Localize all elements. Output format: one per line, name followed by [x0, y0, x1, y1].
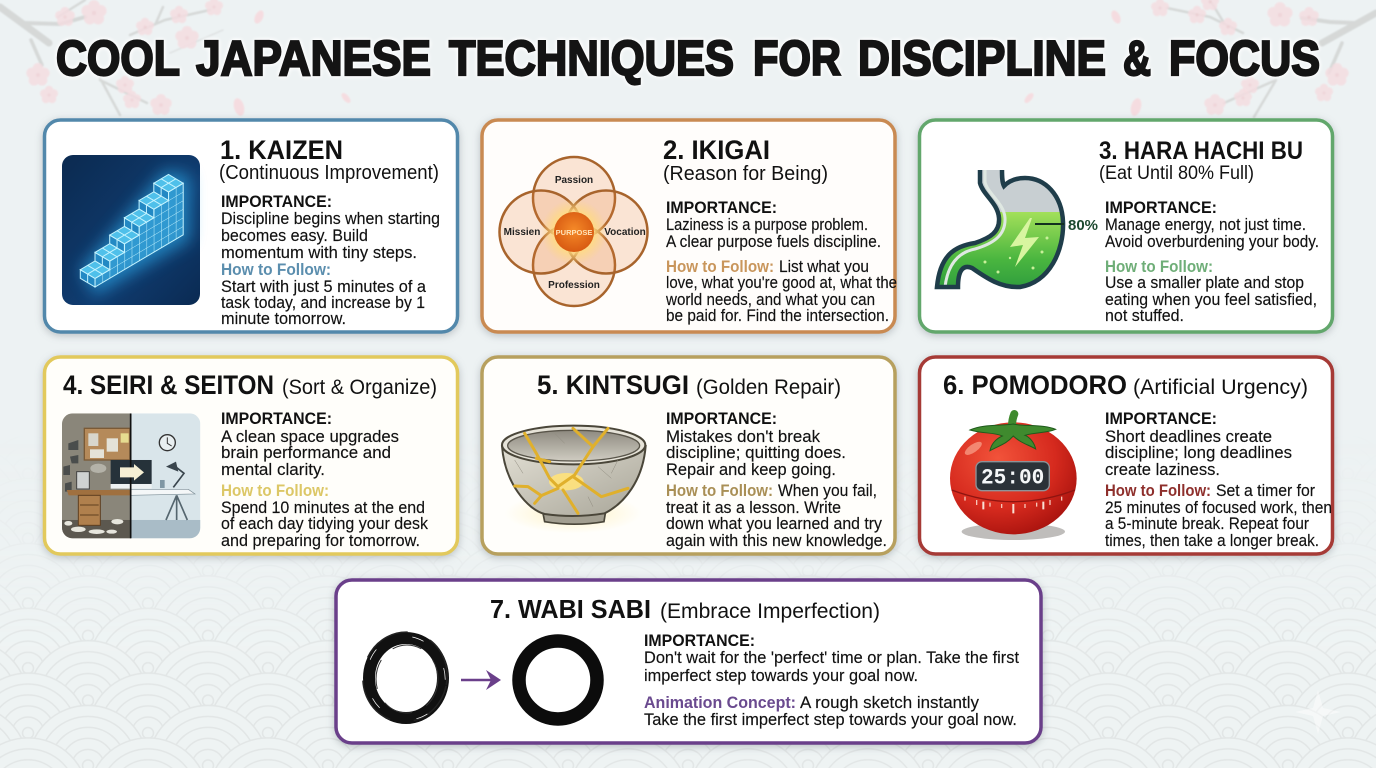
text block: times, then take a longer break. — [1105, 531, 1319, 550]
panel: kintsugi — [482, 357, 895, 554]
heading — [943, 370, 1308, 400]
text block: IMPORTANCE: — [1105, 409, 1217, 428]
heading — [1099, 137, 1303, 184]
text block: Set a timer for — [1216, 481, 1315, 500]
title: FOR — [753, 32, 841, 86]
card frame — [336, 580, 1041, 743]
text block: How to Follow: — [221, 481, 329, 500]
card frame — [482, 120, 895, 332]
heading — [537, 370, 841, 400]
card frame — [44, 120, 458, 332]
text block: How to Follow: — [666, 481, 773, 500]
heading: 2. IKIGAI — [663, 135, 770, 165]
text block: Manage energy, not just time. — [1105, 215, 1306, 234]
text block — [221, 409, 428, 550]
card frame — [44, 357, 458, 554]
title: & — [1123, 32, 1151, 86]
heading: 6. POMODORO — [943, 370, 1127, 400]
text block: A clear purpose fuels discipline. — [666, 232, 881, 251]
icon: ikigai venn diagram: Vocation — [604, 227, 646, 238]
text block: How to Follow: — [1105, 257, 1213, 276]
text block — [1105, 409, 1332, 550]
title: DISCIPLINE — [858, 32, 1106, 86]
wave pattern — [0, 598, 1376, 768]
text block: Spend 10 minutes at the end — [221, 498, 425, 517]
text block: brain performance and — [221, 443, 391, 462]
text block: IMPORTANCE: — [666, 409, 777, 428]
text block: mental clarity. — [221, 460, 325, 479]
panel: wabi sabi — [336, 580, 1041, 743]
text block — [666, 409, 887, 550]
text block — [644, 631, 1019, 729]
text block: 25 minutes of focused work, then — [1105, 498, 1332, 517]
text block: treat it as a lesson. Write — [666, 498, 841, 517]
text block: not stuffed. — [1105, 306, 1184, 325]
text block: List what you — [779, 257, 869, 276]
text block: How to Follow: — [666, 257, 774, 276]
icon: kintsugi bowl — [502, 426, 646, 533]
panel: pomodoro — [920, 357, 1332, 554]
text block: down what you learned and try — [666, 514, 882, 533]
title: FOCUS — [1169, 32, 1320, 86]
card frame — [920, 120, 1332, 332]
icon: tomato timer — [950, 414, 1077, 540]
heading: (Golden Repair) — [696, 376, 841, 399]
text block: IMPORTANCE: — [644, 631, 755, 650]
title: TECHNIQUES — [449, 32, 734, 86]
text block — [665, 198, 897, 325]
panel: hara hachi bu — [920, 120, 1332, 332]
text block: of each day tidying your desk — [221, 514, 428, 533]
icon: perfect enso circle — [519, 641, 597, 719]
icon: messy to clean desk — [62, 413, 200, 538]
icon: ikigai venn diagram: PURPOSE — [556, 228, 592, 237]
text block: discipline; quitting does. — [666, 443, 846, 462]
card frame — [920, 357, 1332, 554]
text block: A clean space upgrades — [221, 427, 399, 446]
heading: (Eat Until 80% Full) — [1099, 163, 1254, 184]
heading: 3. HARA HACHI BU — [1099, 137, 1303, 165]
icon: stomach 80 percent — [930, 165, 1098, 292]
sparkle — [1295, 690, 1341, 734]
title: COOL — [56, 32, 180, 86]
title — [56, 32, 1320, 86]
text block: Avoid overburdening your body. — [1105, 232, 1319, 251]
icon: ikigai venn diagram: Missien — [504, 227, 540, 238]
icon: rough enso circle — [355, 624, 455, 730]
heading — [490, 594, 880, 624]
title: JAPANESE — [196, 32, 431, 86]
heading: (Continuous Improvement) — [219, 162, 439, 184]
heading: (Artificial Urgency) — [1133, 376, 1308, 399]
panel: seiri and seiton — [44, 357, 458, 554]
icon: ikigai venn diagram — [500, 157, 648, 306]
text block: imperfect step towards your goal now. — [644, 666, 918, 685]
heading: 7. WABI SABI — [490, 594, 651, 624]
text block: again with this new knowledge. — [666, 531, 887, 550]
panel: kaizen — [44, 120, 458, 332]
text block: Use a smaller plate and stop — [1105, 273, 1304, 292]
text block — [221, 192, 440, 328]
panel: ikigai — [482, 120, 897, 332]
text block: IMPORTANCE: — [221, 192, 332, 211]
heading: (Sort & Organize) — [282, 376, 437, 399]
heading — [219, 135, 439, 184]
text block: Animation Concept: — [644, 693, 796, 712]
text block: and preparing for tomorrow. — [221, 531, 420, 550]
text block: Don't wait for the 'perfect' time or plan. Take the first — [644, 648, 1019, 667]
heading — [63, 370, 437, 400]
text block: Laziness is a purpose problem. — [666, 215, 868, 234]
heading: 1. KAIZEN — [220, 135, 343, 165]
text block: Discipline begins when starting — [221, 209, 440, 228]
text block: When you fail, — [778, 481, 877, 500]
icon: ikigai venn diagram: Passion — [555, 175, 593, 186]
text block: How to Follow: — [1105, 481, 1211, 500]
text block: Short deadlines create — [1105, 427, 1272, 446]
heading: 5. KINTSUGI — [537, 370, 689, 400]
text block: becomes easy. Build — [221, 226, 368, 245]
text block: IMPORTANCE: — [221, 409, 332, 428]
heading: (Reason for Being) — [663, 163, 828, 185]
text block: task today, and increase by 1 — [221, 293, 425, 312]
heading: 4. SEIRI & SEITON — [63, 370, 274, 400]
icon: ikigai venn diagram: Profession — [548, 280, 600, 291]
heading: (Embrace Imperfection) — [660, 600, 880, 623]
text block: discipline; long deadlines — [1105, 443, 1292, 462]
text block: minute tomorrow. — [221, 309, 346, 328]
text block: Take the first imperfect step towards your goal now. — [644, 710, 1017, 729]
text block: How to Follow: — [221, 260, 331, 279]
text block: create laziness. — [1105, 460, 1220, 479]
text block: IMPORTANCE: — [1105, 198, 1217, 217]
text block: IMPORTANCE: — [666, 198, 777, 217]
icon: tomato timer: 25:00 — [981, 466, 1044, 491]
icon: glowing staircase — [62, 155, 200, 305]
cherry branch left — [0, 0, 352, 117]
text block: momentum with tiny steps. — [221, 243, 417, 262]
text block: Start with just 5 minutes of a — [221, 277, 427, 296]
text block — [1105, 198, 1319, 325]
text block: A rough sketch instantly — [800, 693, 979, 712]
text block: Repair and keep going. — [666, 460, 836, 479]
arrow — [461, 670, 501, 690]
cherry branch right — [1023, 0, 1376, 117]
icon: stomach 80 percent: 80% — [1068, 217, 1098, 234]
text block: eating when you feel satisfied, — [1105, 290, 1317, 309]
text block: Mistakes don't break — [666, 427, 820, 446]
text block: be paid for. Find the intersection. — [666, 306, 889, 325]
heading — [663, 135, 828, 185]
text block: love, what you're good at, what the — [666, 273, 897, 292]
card frame — [482, 357, 895, 554]
text block: a 5-minute break. Repeat four — [1105, 514, 1309, 533]
text block: world needs, and what you can — [665, 290, 875, 309]
